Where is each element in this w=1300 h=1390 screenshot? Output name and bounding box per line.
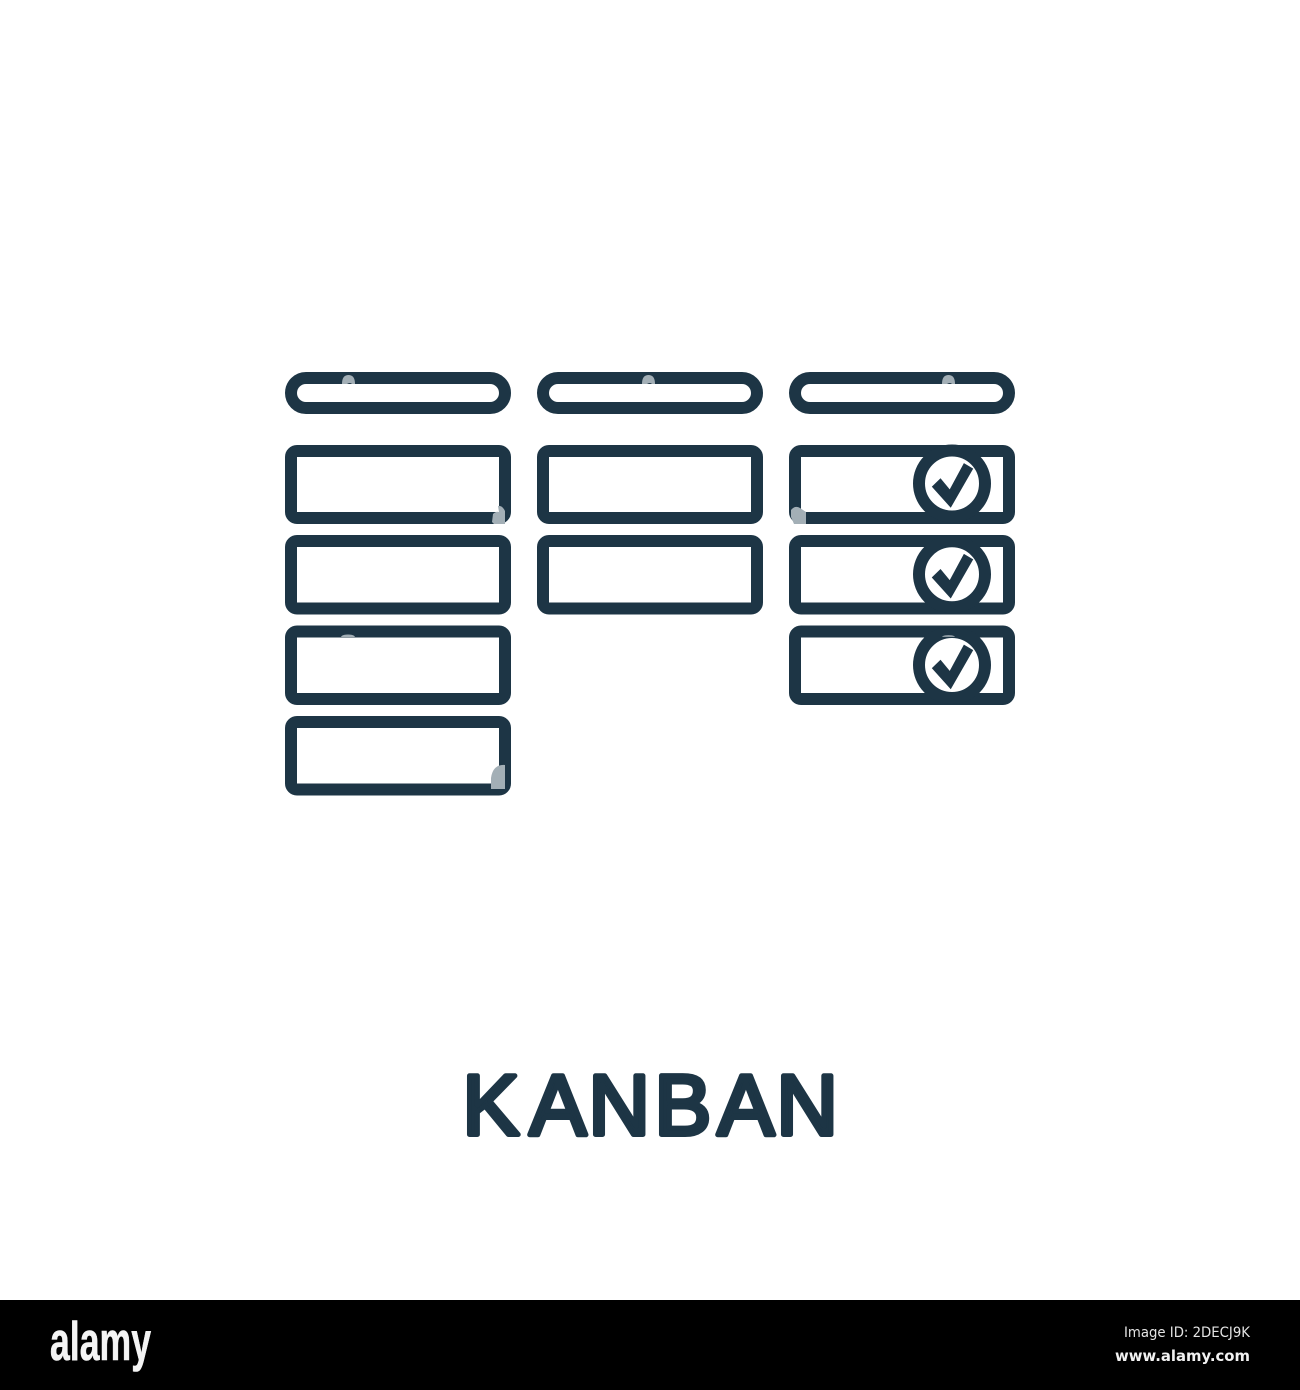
column 2 card 2 <box>543 541 757 608</box>
column 2 header <box>543 378 757 408</box>
watermark fragments <box>341 375 955 789</box>
column 3 card 2 <box>795 541 1009 608</box>
icon: check badge 1 <box>919 450 985 516</box>
logo: alamy: alamy <box>50 1310 151 1372</box>
column 3 card 3 <box>795 632 1009 699</box>
footer band <box>0 1300 1300 1390</box>
column 1 header <box>291 378 505 408</box>
column 3: done <box>795 378 1009 699</box>
column 1: to do <box>291 378 505 790</box>
column 2: in progress <box>543 378 757 608</box>
icon: check badge 2 <box>919 541 985 607</box>
column 3 header <box>795 378 1009 408</box>
column 1 card 1 <box>291 451 505 518</box>
icon: check badge 3 <box>919 632 985 698</box>
column 3 card 1 <box>795 451 1009 518</box>
column 1 card 2 <box>291 541 505 608</box>
kanban icon <box>291 378 1009 790</box>
website: www.alamy.com <box>1115 1347 1250 1365</box>
column 1 card 3 <box>291 632 505 699</box>
image id: Image ID: 2DECJ9K <box>1124 1325 1251 1341</box>
title: KANBAN <box>462 1059 838 1154</box>
column 2 card 1 <box>543 451 757 518</box>
column 1 card 4 <box>291 722 505 790</box>
